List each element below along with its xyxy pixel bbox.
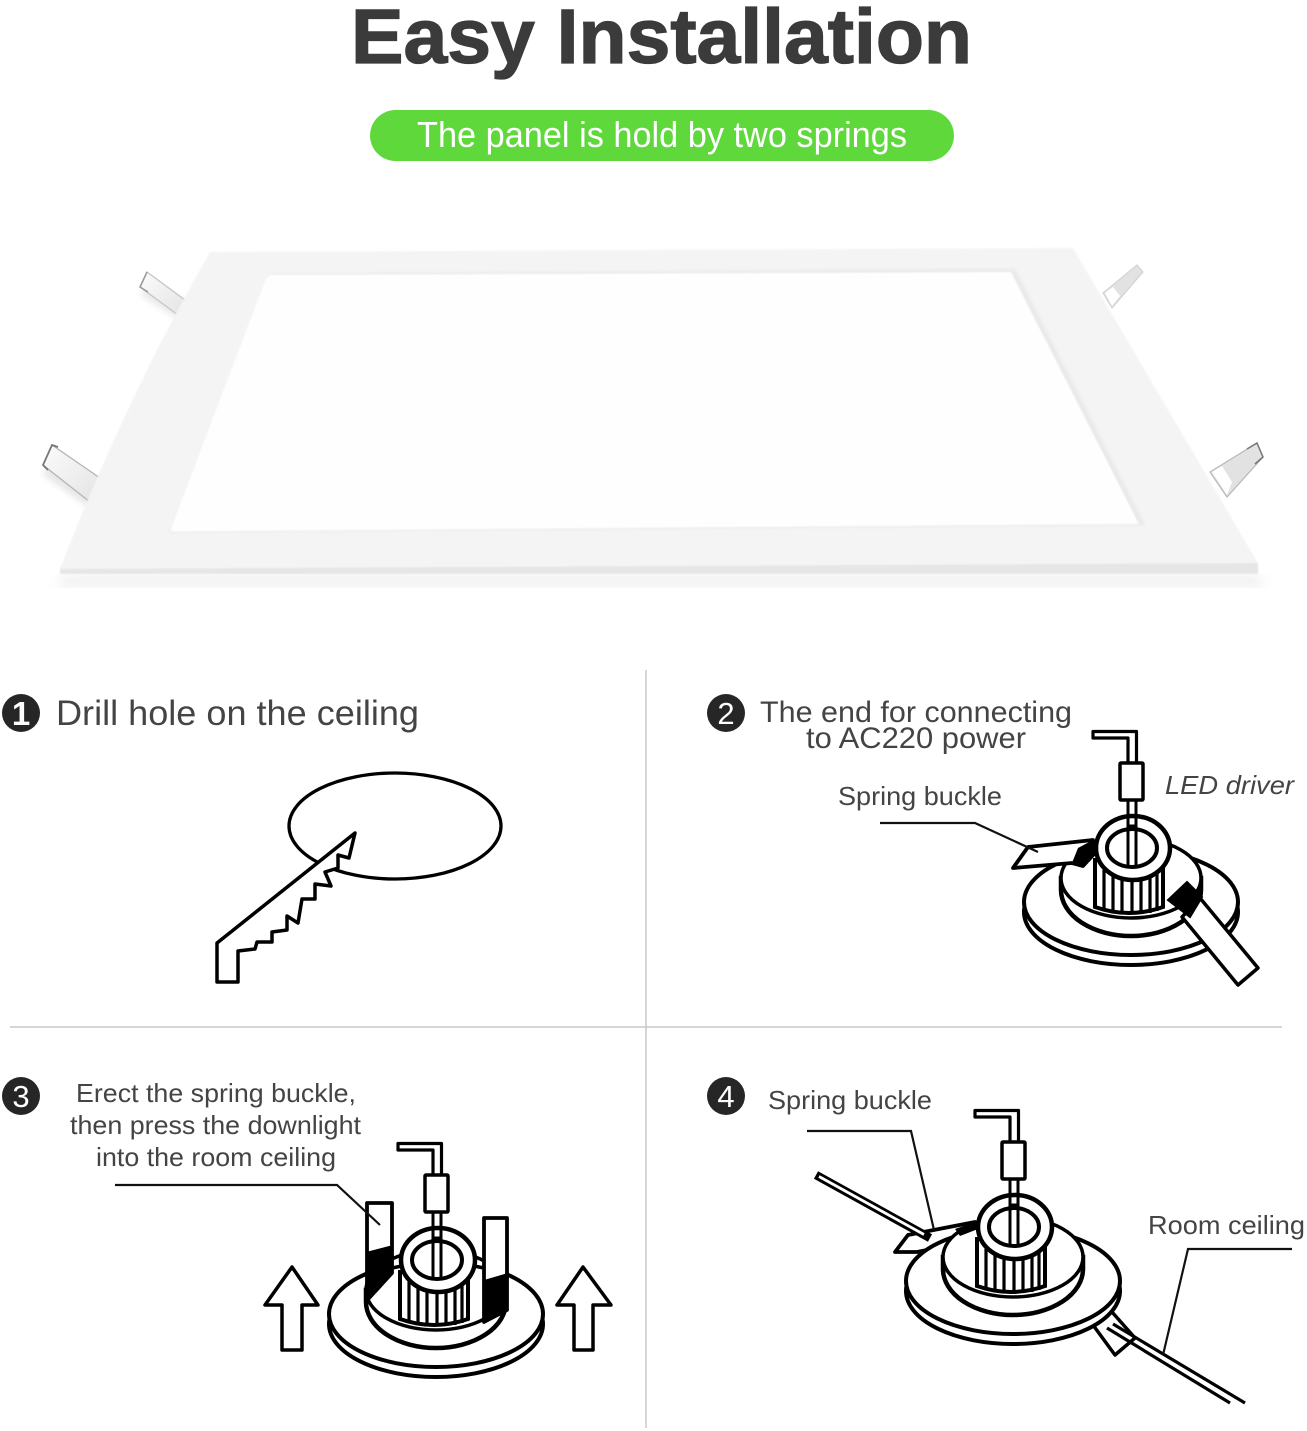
left raised spring — [366, 1203, 402, 1300]
step 4 panel — [707, 1077, 1305, 1403]
step 2 number badge: 2 — [717, 696, 735, 731]
spring clip: bottom right — [1210, 443, 1263, 497]
label: spring buckle: Spring buckle — [838, 781, 1002, 811]
LED panel product image — [43, 248, 1264, 586]
left spring buckle — [1013, 840, 1095, 868]
subtitle pill: The panel is hold by two springs — [417, 114, 907, 155]
downlight illustration — [906, 1110, 1120, 1344]
leader line — [880, 823, 1038, 852]
arrow: left up — [265, 1267, 318, 1350]
step 2 number badge — [707, 694, 745, 732]
dividers — [10, 670, 1282, 1428]
right spring buckle — [1168, 882, 1258, 985]
step 2 heading: The end for connecting — [760, 696, 1072, 729]
downlight illustration — [1024, 732, 1238, 965]
step 2 heading — [760, 696, 1072, 755]
step 3 instructions: then press the downlight — [70, 1110, 362, 1140]
step 2 heading: to AC220 power — [806, 722, 1026, 755]
label: LED driver: LED driver — [1165, 770, 1295, 800]
spring clip: top right — [1103, 265, 1143, 308]
label: spring buckle: Spring buckle — [768, 1085, 932, 1115]
step 2 panel — [707, 694, 1295, 985]
step 1 number badge: 1 — [12, 695, 30, 732]
step 1 panel — [2, 694, 501, 982]
icon: ceiling hole — [289, 773, 501, 879]
step 3 instructions — [70, 1078, 362, 1172]
step 3 panel — [2, 1077, 611, 1377]
spring clip: top left — [140, 272, 190, 322]
right ceiling section — [1107, 1324, 1245, 1403]
left spring buckle — [895, 1222, 977, 1252]
arrow: right up — [557, 1267, 611, 1350]
right spring buckle — [1093, 1312, 1135, 1355]
step 4 number badge: 4 — [717, 1079, 735, 1114]
step 3 instructions: into the room ceiling — [96, 1142, 336, 1172]
panel light surface — [170, 269, 1145, 532]
leader line: spring buckle — [807, 1131, 934, 1230]
leader line: room ceiling — [1163, 1249, 1292, 1355]
step 4 number badge — [707, 1077, 745, 1115]
icon: saw — [217, 833, 355, 982]
black buckle wedge — [955, 1221, 978, 1236]
step 1 number badge — [2, 694, 40, 732]
label: room ceiling: Room ceiling — [1148, 1210, 1305, 1240]
right raised spring — [474, 1218, 508, 1322]
panel frame — [60, 248, 1258, 574]
leader line — [115, 1185, 380, 1225]
spring clip: bottom left — [43, 445, 102, 510]
downlight illustration — [329, 1144, 543, 1377]
left ceiling section — [816, 1175, 930, 1238]
step 1 heading: Drill hole on the ceiling — [56, 694, 419, 733]
step 3 number badge: 3 — [12, 1079, 30, 1114]
step 3 instructions: Erect the spring buckle, — [76, 1078, 356, 1108]
step 3 number badge — [2, 1077, 40, 1115]
